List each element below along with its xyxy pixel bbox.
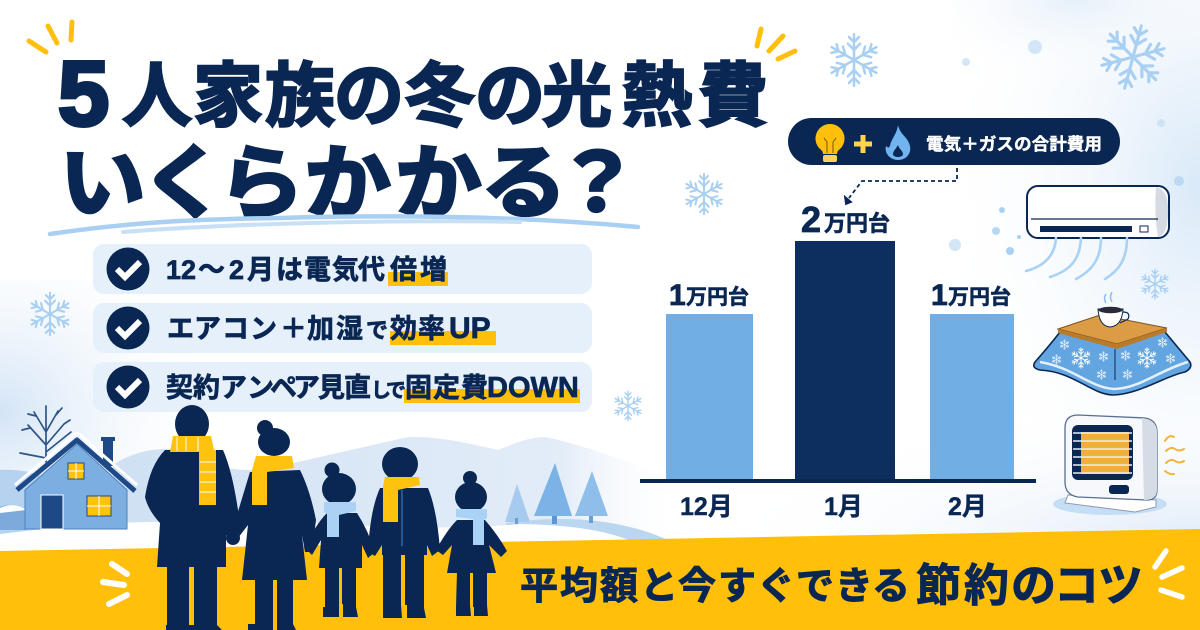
- item 3: 契約アンペア見直: [166, 373, 371, 403]
- family silhouette: [145, 405, 507, 630]
- child 2: [436, 471, 507, 616]
- banner sparks right: [1155, 551, 1182, 597]
- bar: December: 1: [669, 279, 686, 312]
- illustration: snowy house: [15, 434, 137, 529]
- title: [58, 43, 768, 228]
- item 2: エアコン＋加湿: [167, 314, 363, 344]
- airflow: [1026, 238, 1127, 279]
- bar: December: 12月: [680, 493, 733, 521]
- bar: December: [666, 279, 753, 521]
- title: 人家族の冬の光熱費: [122, 57, 768, 135]
- bar: January: 2: [801, 199, 821, 240]
- bar: January: 万円台: [824, 211, 890, 236]
- illustration: bare tree: [20, 406, 71, 462]
- icon: electric heater: [1053, 415, 1184, 515]
- icon: gas flame: [886, 125, 910, 160]
- illustration: winter trees: [505, 463, 608, 524]
- bottom banner: [0, 529, 1200, 630]
- callout pill: electricity + gas: [788, 118, 1120, 165]
- title underline brush: [50, 216, 638, 234]
- bar: January: [795, 199, 895, 521]
- item 2: で: [366, 318, 388, 343]
- icon: air conditioner: [1026, 186, 1169, 279]
- item 3: しで: [371, 380, 406, 402]
- heat waves: [1165, 436, 1184, 474]
- child 1: [305, 462, 375, 617]
- bar: February: 1: [931, 279, 948, 312]
- item 1: 12～2月は電気代倍増: [166, 255, 447, 285]
- bar chart: [640, 199, 1036, 521]
- checklist: [93, 244, 592, 412]
- banner text: 節約のコツ: [916, 560, 1143, 611]
- bar: December: 万円台: [686, 286, 749, 309]
- title sparks: [29, 22, 795, 59]
- banner sparks left: [103, 564, 127, 604]
- parent 2: [368, 447, 440, 618]
- mother: [234, 420, 316, 630]
- pill label: 電気＋ガスの合計費用: [926, 135, 1102, 154]
- dotted connector arrow: [845, 168, 957, 204]
- icon: plus: [854, 135, 872, 153]
- bar: February: 万円台: [948, 286, 1011, 309]
- icon: kotatsu: [1034, 292, 1191, 395]
- father: [145, 405, 240, 630]
- item 2: 効率: [390, 314, 445, 344]
- title: 5: [58, 43, 109, 145]
- banner text: [520, 560, 1143, 611]
- banner text: 平均額と今すぐできる: [520, 566, 910, 608]
- coffee cup: [1098, 309, 1123, 327]
- bar: February: 2月: [948, 493, 987, 521]
- item 2: UP: [449, 312, 491, 345]
- item 3: 固定費: [405, 373, 488, 403]
- bar: February: [930, 279, 1014, 521]
- title: いくらかかる？: [59, 139, 640, 228]
- item 2: [93, 303, 592, 353]
- icon: light bulb: [816, 124, 844, 162]
- snowflakes and snow dots: [29, 18, 1184, 457]
- item 3: DOWN: [487, 372, 579, 404]
- item 1: [93, 244, 592, 294]
- item 3: [93, 362, 592, 412]
- landscape: hills and snow ground: [0, 437, 680, 560]
- bar: January: 1月: [824, 493, 863, 521]
